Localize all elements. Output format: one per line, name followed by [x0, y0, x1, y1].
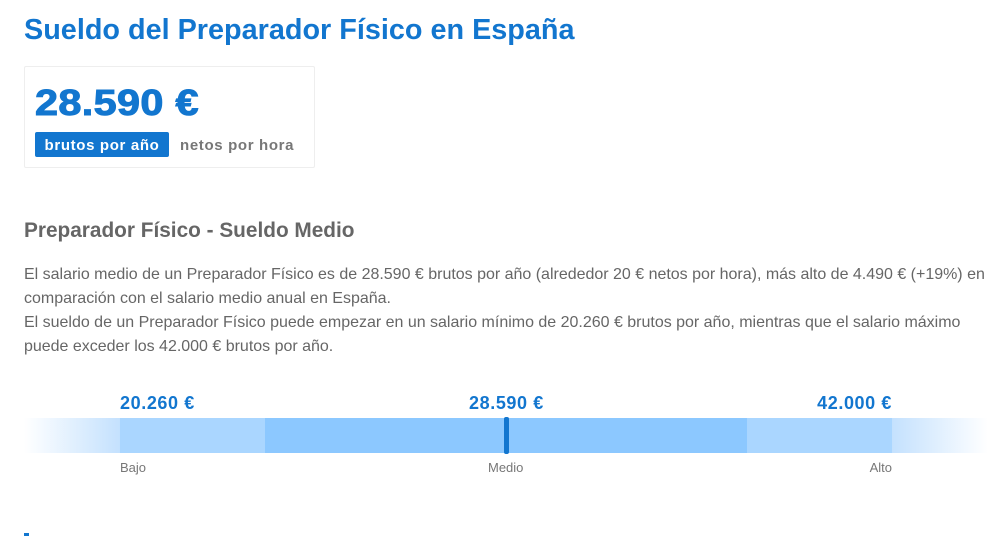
high value: 42.000 €: [817, 393, 892, 413]
left fade: [24, 418, 120, 453]
inactive tab: net per hour: netos por hora: [180, 137, 294, 154]
description text: El salario medio de un Preparador Físico es de 28.590 € brutos por año (alrededor 20 € netos por hora), más alto de 4.490 € (+19%) en: [24, 266, 985, 283]
description text: [24, 266, 985, 355]
high band: [747, 418, 892, 453]
salary figure: 28.590 €: [35, 82, 199, 123]
label high: Alto: [870, 460, 892, 475]
low band: [120, 418, 265, 453]
label low: Bajo: [120, 460, 146, 475]
description text: comparación con el salario medio anual en España.: [24, 290, 391, 307]
right fade: [892, 418, 988, 453]
low value: 20.260 €: [120, 393, 195, 413]
median marker: [504, 417, 509, 454]
description text: El sueldo de un Preparador Físico puede empezar en un salario mínimo de 20.260 € brutos por año, mientras que el salario máximo: [24, 314, 960, 331]
salary range chart: [37, 393, 974, 475]
panel: salary summary: [24, 66, 315, 168]
active tab: gross per year: brutos por año: [45, 137, 159, 154]
title: Sueldo del Preparador Físico en España: [24, 14, 575, 46]
active tab: gross per year: [35, 132, 169, 157]
label medium: Medio: [488, 460, 523, 475]
description text: puede exceder los 42.000 € brutos por año.: [24, 338, 333, 355]
middle band: [265, 418, 747, 453]
section heading: Preparador Físico - Sueldo Medio: [24, 219, 354, 242]
median value: 28.590 €: [469, 393, 544, 413]
small accent mark: [24, 533, 29, 536]
